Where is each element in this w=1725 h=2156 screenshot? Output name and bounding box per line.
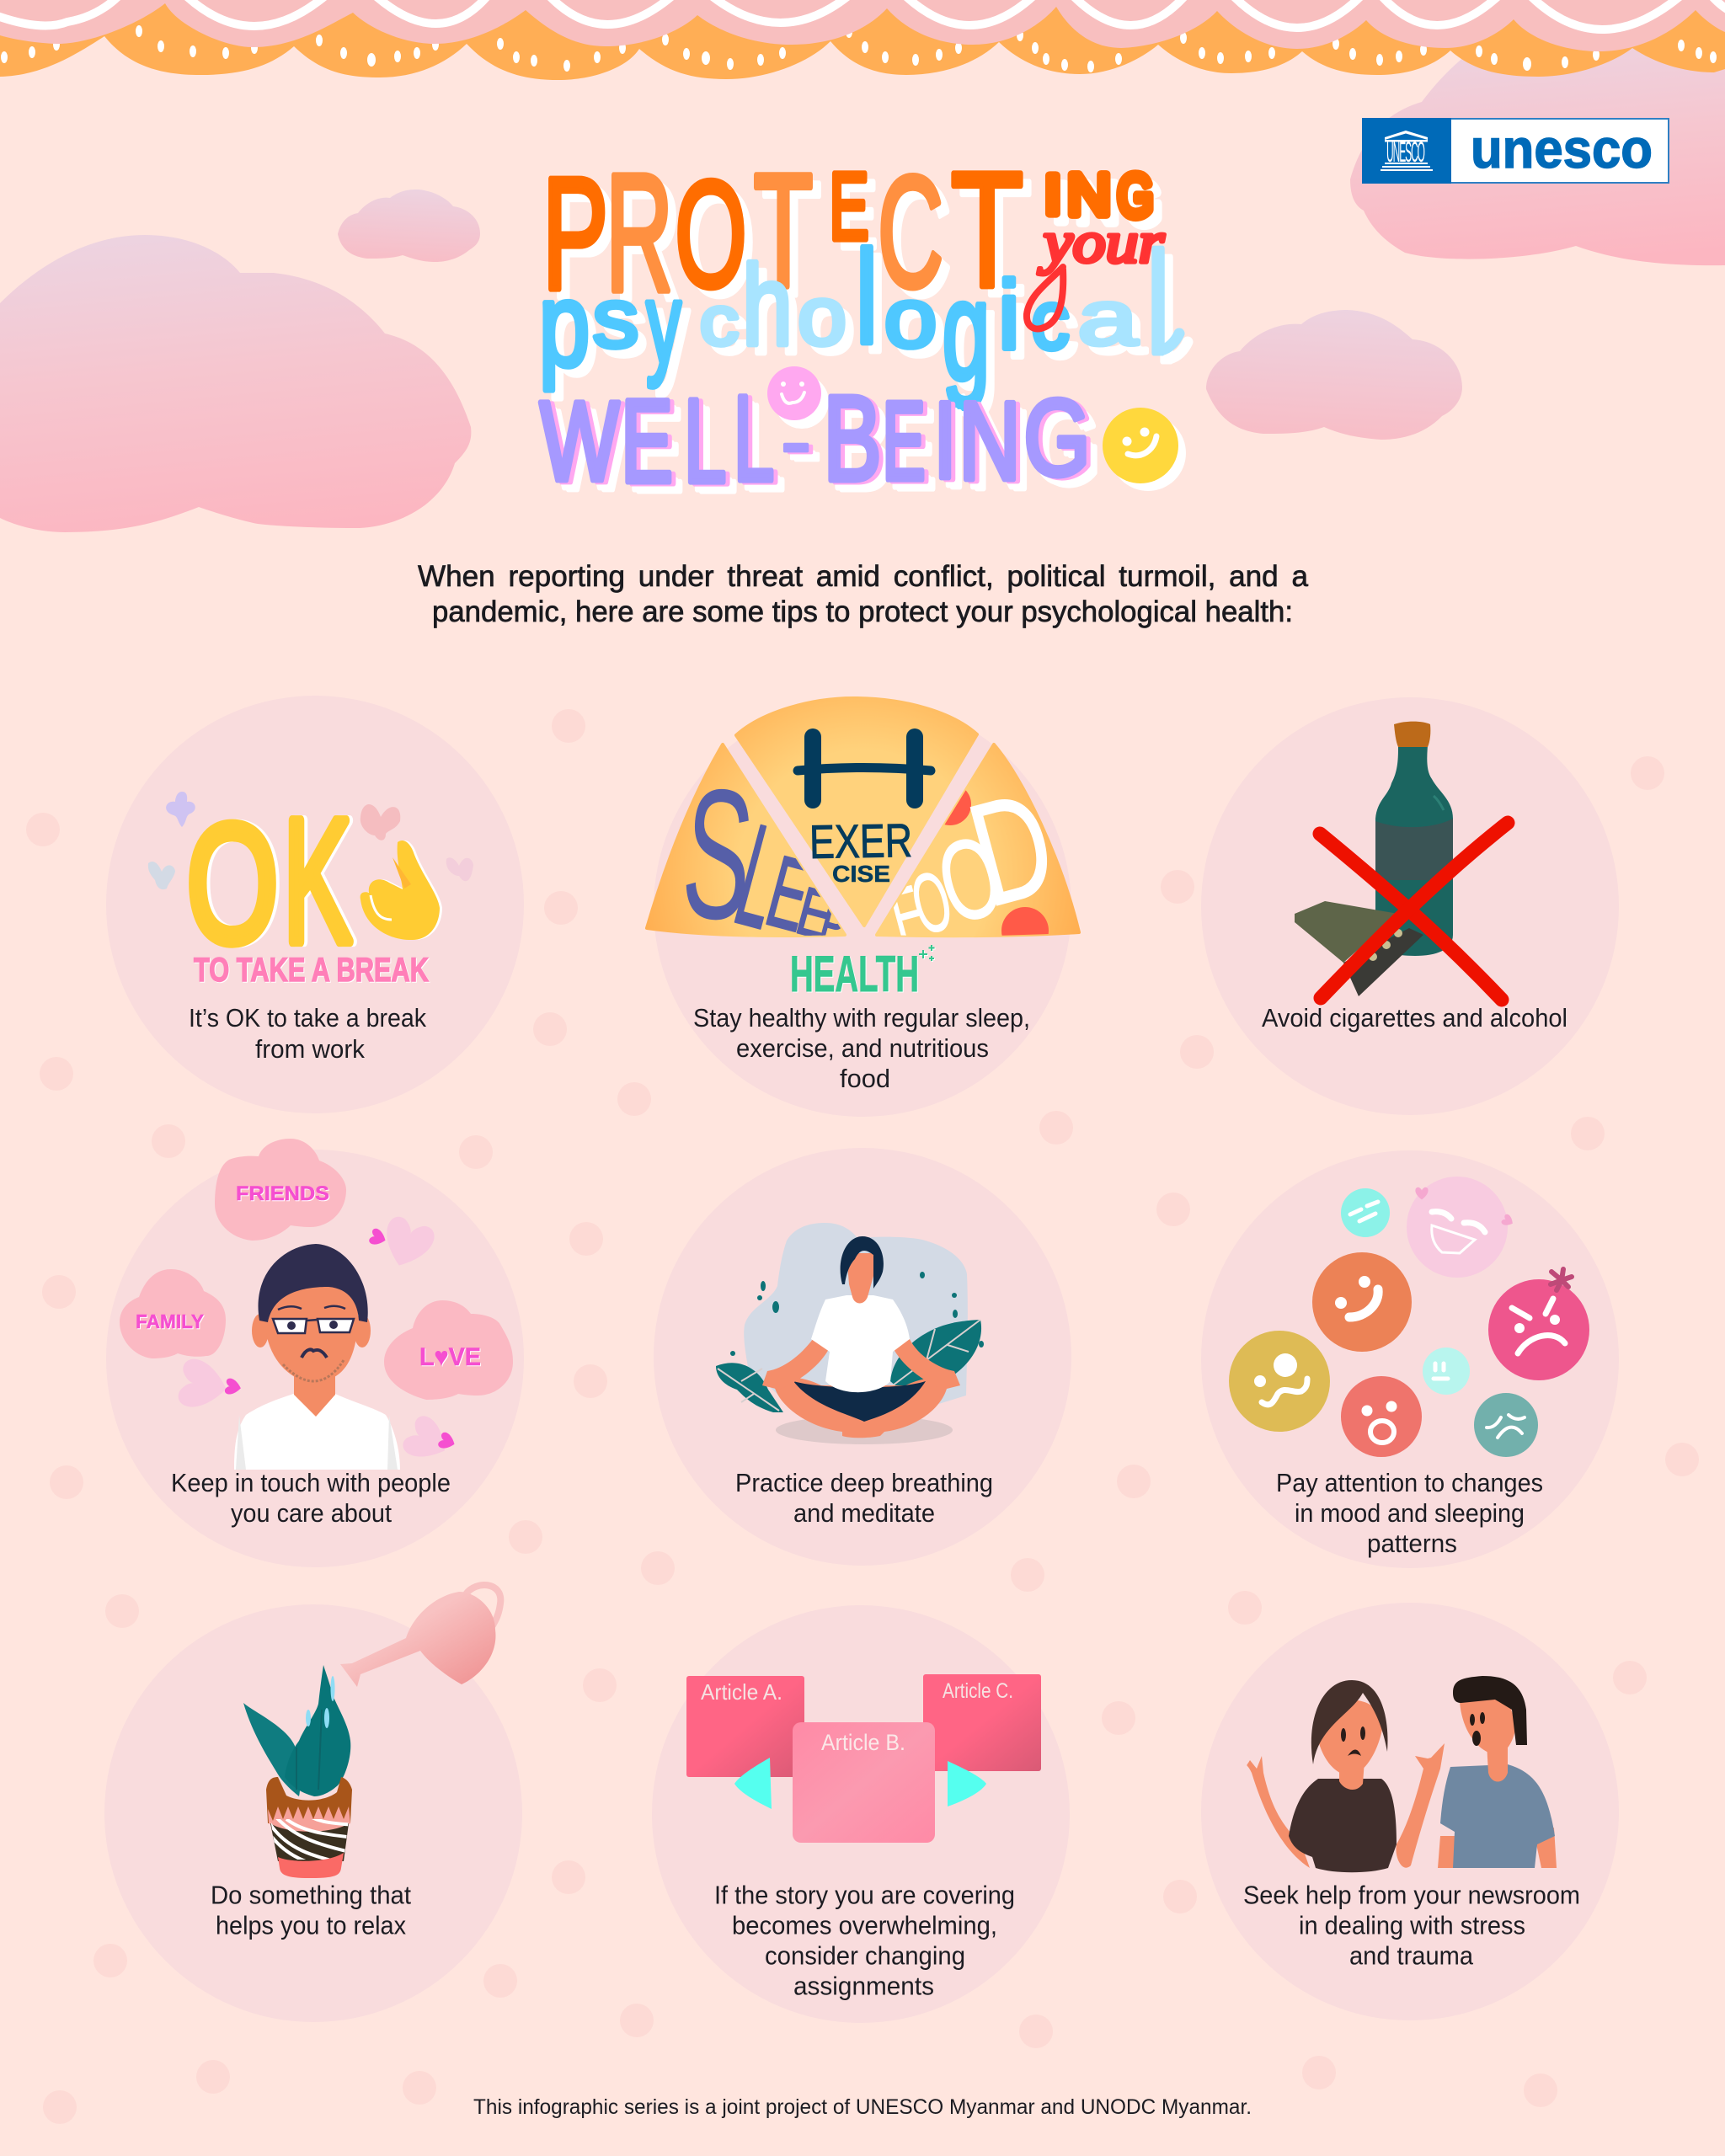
- footer credit: This infographic series is a joint project of UNESCO Myanmar and UNODC Myanmar.: [473, 2095, 1252, 2119]
- background dots: [26, 709, 1699, 2124]
- lettering: sleep: S: [676, 749, 761, 960]
- lettering: sleep: [686, 788, 841, 936]
- title line: psychological: o: [884, 270, 937, 366]
- caption: food: [840, 1065, 890, 1093]
- intro text: [418, 560, 1309, 628]
- title line: PROTECT ING: T: [951, 139, 1023, 322]
- caption: and trauma: [1349, 1942, 1473, 1971]
- intro text: When reporting under threat amid conflict, political turmoil, and a: [418, 560, 1309, 593]
- caption: It’s OK to take a break: [189, 1004, 427, 1033]
- title word: your: your: [1038, 211, 1165, 275]
- arrow: right: [948, 1761, 986, 1806]
- icon: small teal face: [1341, 1188, 1390, 1237]
- title line: WELL-BEING: I: [933, 381, 957, 501]
- title line: WELL-BEING: L: [734, 371, 774, 506]
- lettering: food: O: [926, 811, 1015, 948]
- panel: keep in touch: [106, 1139, 524, 1567]
- caption: Keep in touch with people: [171, 1469, 451, 1497]
- card: Article B: [793, 1722, 935, 1843]
- panel: do something relaxing: [104, 1585, 522, 2022]
- OK lettering: K: [283, 783, 352, 979]
- cloud: family: FAMILY: [136, 1310, 204, 1332]
- icon: sad teal face: [1474, 1393, 1538, 1457]
- caption: [714, 1881, 1015, 2001]
- caption: in dealing with stress: [1299, 1912, 1525, 1940]
- temple emblem: [1381, 131, 1433, 171]
- card: Article C: [923, 1674, 1041, 1771]
- title line: psychological: i: [998, 261, 1020, 371]
- cloud: large left: [0, 235, 471, 532]
- temple emblem: UNESCO: [1386, 137, 1425, 168]
- cloud: top right: [1350, 42, 1725, 265]
- title line: PROTECT ING: E: [829, 153, 869, 259]
- title line: PROTECT ING: O: [675, 149, 747, 319]
- leaf right: [890, 1320, 981, 1398]
- caption: [735, 1469, 993, 1528]
- cloud: middle right: [1206, 310, 1462, 440]
- panel: change assignments: [652, 1605, 1070, 2023]
- smiley: pink: [767, 366, 821, 420]
- leaf left: [716, 1363, 783, 1412]
- lettering: exercise: [809, 814, 913, 887]
- smiley: yellow: [1103, 408, 1178, 483]
- caption: patterns: [1367, 1529, 1457, 1558]
- icon: barbell: [798, 737, 931, 800]
- title line: psychological: p: [539, 258, 590, 391]
- logo: UNESCO: [1362, 118, 1669, 184]
- illustration: meditating person: [716, 1223, 984, 1444]
- title line: PROTECT ING: N: [1067, 162, 1111, 228]
- panel: stay healthy: [647, 698, 1079, 1117]
- caption: you care about: [231, 1499, 392, 1528]
- title line: psychological: c: [700, 281, 739, 360]
- icon: watering can: [340, 1585, 500, 1687]
- icon: pale neutral face: [1423, 1348, 1470, 1395]
- caption: [1276, 1469, 1543, 1558]
- logo wordmark: unesco: [1471, 118, 1653, 179]
- caption: exercise, and nutritious: [736, 1034, 989, 1063]
- lettering: sleep: E: [756, 834, 821, 953]
- title line: WELL-BEING: E: [882, 378, 926, 503]
- intro text: pandemic, here are some tips to protect your psychological health:: [432, 595, 1293, 628]
- panel: avoid cigarettes and alcohol: [1201, 697, 1619, 1115]
- lettering: sleep: E: [789, 873, 840, 954]
- lettering: food: D: [954, 760, 1070, 938]
- cloud: love: L♥VE: [419, 1343, 481, 1371]
- title line: PROTECT ING: R: [606, 140, 673, 327]
- icon: angry magenta face: [1488, 1269, 1589, 1380]
- title line: psychological: o: [798, 271, 846, 362]
- caption: from work: [255, 1035, 366, 1064]
- icon: flowers: [148, 792, 473, 889]
- title: PROTECTING your psychological WELL-BEING: [539, 139, 1179, 508]
- caption: [693, 1004, 1030, 1093]
- caption: Practice deep breathing: [735, 1469, 993, 1497]
- cloud: friends: FRIENDS: [236, 1182, 329, 1205]
- caption: If the story you are covering: [714, 1881, 1015, 1910]
- title line: PROTECT ING: [542, 139, 1153, 327]
- caption: and meditate: [793, 1499, 935, 1528]
- title word: your: [1027, 211, 1165, 328]
- lettering: To take a break: TO TAKE A BREAK: [194, 952, 429, 989]
- title line: PROTECT ING: T: [754, 140, 813, 321]
- title line: psychological: y: [647, 259, 681, 387]
- caption: in mood and sleeping: [1295, 1499, 1525, 1528]
- lettering: sleep: P: [814, 891, 853, 957]
- panel: deep breathing: [654, 1148, 1071, 1566]
- panel: take a break: [106, 696, 524, 1113]
- caption: Stay healthy with regular sleep,: [693, 1004, 1030, 1033]
- title line: psychological: l: [856, 223, 878, 371]
- title line: psychological: s: [592, 272, 639, 366]
- caption: Seek help from your newsroom: [1243, 1881, 1580, 1910]
- icon: potted plant: [243, 1665, 354, 1878]
- title line: psychological: [539, 223, 1179, 409]
- fan: left wedge sleep: [647, 744, 845, 936]
- title line: psychological: c: [1031, 275, 1070, 367]
- title line: psychological: g: [943, 253, 990, 409]
- title line: WELL-BEING: [540, 370, 1091, 508]
- icon: bottle: [1375, 722, 1453, 956]
- top scalloped border: [0, 0, 1725, 80]
- cloud: small upper left: [338, 189, 480, 262]
- OK lettering: [187, 783, 352, 979]
- caption: Pay attention to changes: [1276, 1469, 1543, 1497]
- title line: PROTECT ING: P: [542, 144, 608, 323]
- caption: [189, 1004, 427, 1064]
- cloud: family: [120, 1269, 226, 1358]
- title line: psychological: l: [1147, 223, 1169, 384]
- icon: smiling orange face: [1312, 1252, 1412, 1352]
- caption: [211, 1881, 412, 1940]
- lettering: health: HEALTH: [790, 946, 919, 1002]
- title line: PROTECT ING: G: [1118, 163, 1153, 230]
- lettering: food: O: [902, 853, 961, 953]
- card: Article A: [686, 1676, 804, 1777]
- caption: assignments: [793, 1972, 934, 2001]
- title line: WELL-BEING: B: [823, 370, 882, 506]
- lettering: sleep: L: [722, 794, 797, 958]
- title line: WELL-BEING: N: [959, 378, 1021, 503]
- lettering: food: [893, 799, 1048, 936]
- lettering: food: F: [882, 868, 931, 958]
- fan: center wedge exercise: [736, 698, 977, 926]
- icon: hearts: [177, 1214, 457, 1469]
- title line: WELL-BEING: -: [781, 393, 811, 488]
- icon: laughing pink face: [1407, 1177, 1515, 1278]
- cloud: friends: [215, 1139, 346, 1241]
- title line: psychological: a: [1077, 275, 1138, 361]
- illustration: man: [1438, 1676, 1557, 1868]
- caption: Avoid cigarettes and alcohol: [1262, 1004, 1567, 1033]
- caption: helps you to relax: [216, 1912, 406, 1940]
- icon: tomato circles: [945, 790, 1049, 936]
- lettering: exercise: CISE: [832, 861, 890, 887]
- caption: consider changing: [765, 1942, 965, 1971]
- icon: yellow face: [1229, 1331, 1330, 1432]
- title line: PROTECT ING: I: [1044, 163, 1062, 227]
- arrow: left: [734, 1758, 772, 1809]
- icon: red cross: [1320, 823, 1508, 1000]
- fan: right wedge food: [877, 744, 1079, 936]
- caption: [171, 1469, 451, 1528]
- title line: psychological: h: [742, 242, 793, 369]
- OK lettering: O: [187, 789, 278, 978]
- title line: PROTECT ING: C: [878, 144, 943, 320]
- title line: WELL-BEING: L: [684, 376, 726, 508]
- illustration: man with glasses: [234, 1244, 400, 1470]
- caption: [1243, 1881, 1580, 1971]
- caption: Do something that: [211, 1881, 412, 1910]
- card: Article C: Article C.: [943, 1679, 1013, 1703]
- panel: seek help: [1201, 1603, 1619, 2020]
- illustration: woman: [1247, 1680, 1445, 1872]
- caption: becomes overwhelming,: [732, 1912, 997, 1940]
- icon: OK hand: [360, 841, 440, 940]
- title line: WELL-BEING: G: [1023, 377, 1091, 499]
- title line: WELL-BEING: E: [621, 376, 673, 508]
- card: Article A: Article A.: [701, 1679, 782, 1705]
- icon: cigarette pack: [1295, 901, 1423, 996]
- icon: surprised red face: [1341, 1376, 1422, 1457]
- lettering: exercise: EXER: [809, 814, 913, 868]
- card: Article B: Article B.: [821, 1730, 905, 1755]
- title line: WELL-BEING: W: [540, 379, 620, 504]
- cloud: love: [384, 1300, 513, 1400]
- panel: mood changes: [1201, 1150, 1619, 1568]
